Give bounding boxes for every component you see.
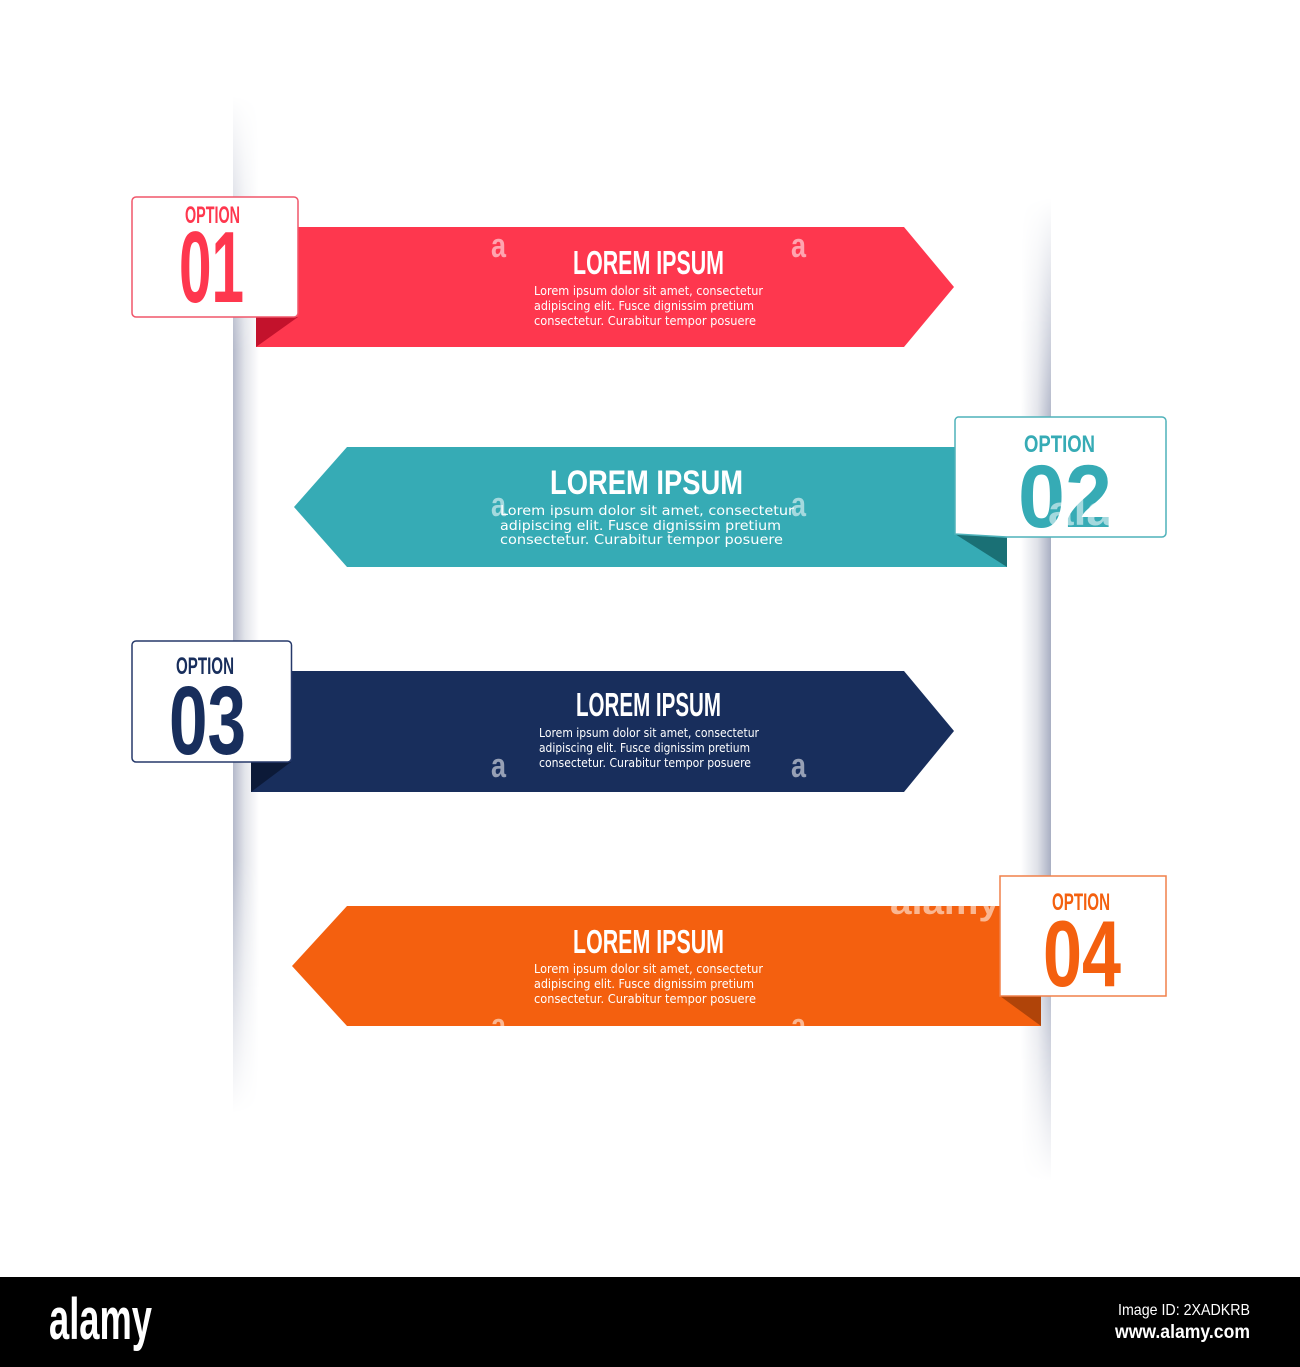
watermark glyphs: a [491,747,507,785]
number card 1 [132,197,298,324]
watermark glyphs: a [791,1007,807,1045]
body text 1: Lorem ipsum dolor sit amet, consectetur [534,284,763,298]
heading 3: LOREM IPSUM [576,686,721,723]
number card 4: 04 [1043,901,1121,1006]
watermark glyphs: ala [1048,487,1113,534]
arrow ribbon 4 [292,906,1041,1026]
watermark glyphs: a [491,1007,507,1045]
watermark glyphs: alamy [890,881,1000,922]
image id: Image ID: 2XADKRB [1118,1302,1250,1319]
body text 3: Lorem ipsum dolor sit amet, consectetur [539,726,759,740]
body text 3 [539,726,759,770]
number card 1: 01 [179,212,244,324]
body text 3: consectetur. Curabitur tempor posuere [539,756,751,770]
number card 4: OPTION [1052,889,1110,916]
body text 2: consectetur. Curabitur tempor posuere [500,533,783,548]
ribbon fold 4 [1000,996,1041,1026]
footer bar [0,1277,1300,1367]
body text 4: adipiscing elit. Fusce dignissim pretium [534,977,754,991]
body text 1: consectetur. Curabitur tempor posuere [534,314,756,328]
heading 4: LOREM IPSUM [573,923,724,960]
body text 4 [534,962,763,1006]
ribbon fold 1 [256,317,298,347]
footer logo: alamy [49,1287,152,1352]
body text 4: consectetur. Curabitur tempor posuere [534,992,756,1006]
number card 3: OPTION [176,653,234,680]
panel: option 2 [294,417,1166,567]
body text 1: adipiscing elit. Fusce dignissim pretium [534,299,754,313]
number card 4 [1000,876,1166,1006]
body text 3: adipiscing elit. Fusce dignissim pretium [539,741,750,755]
ribbon fold 2 [955,534,1007,567]
right page shadow [1025,222,1051,1158]
watermark glyphs: a [491,227,507,265]
number card 1: OPTION [185,202,240,229]
body text 4: Lorem ipsum dolor sit amet, consectetur [534,962,763,976]
footer url: www.alamy.com [1114,1322,1250,1343]
watermark glyphs: a [491,486,507,524]
number card 2: 02 [1018,446,1112,546]
arrow ribbon 1 [256,227,954,347]
number card 3 [132,641,292,775]
panel: option 4 [292,876,1166,1026]
arrow ribbon 3 [251,671,954,792]
arrow ribbon 2 [294,447,1007,567]
left page shadow [233,125,255,1084]
watermark glyphs: a [791,486,807,524]
panel: option 3 [132,641,954,792]
heading 2: LOREM IPSUM [550,464,743,502]
number card 2 [955,417,1166,546]
number card 3: 03 [169,666,246,775]
watermark glyphs: a [791,227,807,265]
heading 1: LOREM IPSUM [573,244,724,281]
body text 1 [534,284,763,328]
body text 2 [500,504,795,548]
panel: option 1 [132,197,954,347]
ribbon fold 3 [251,762,291,792]
watermark glyphs [491,227,1113,1045]
body text 2: Lorem ipsum dolor sit amet, consectetur [500,504,795,519]
body text 2: adipiscing elit. Fusce dignissim pretium [500,519,781,534]
number card 2: OPTION [1024,431,1095,458]
watermark glyphs: a [791,747,807,785]
